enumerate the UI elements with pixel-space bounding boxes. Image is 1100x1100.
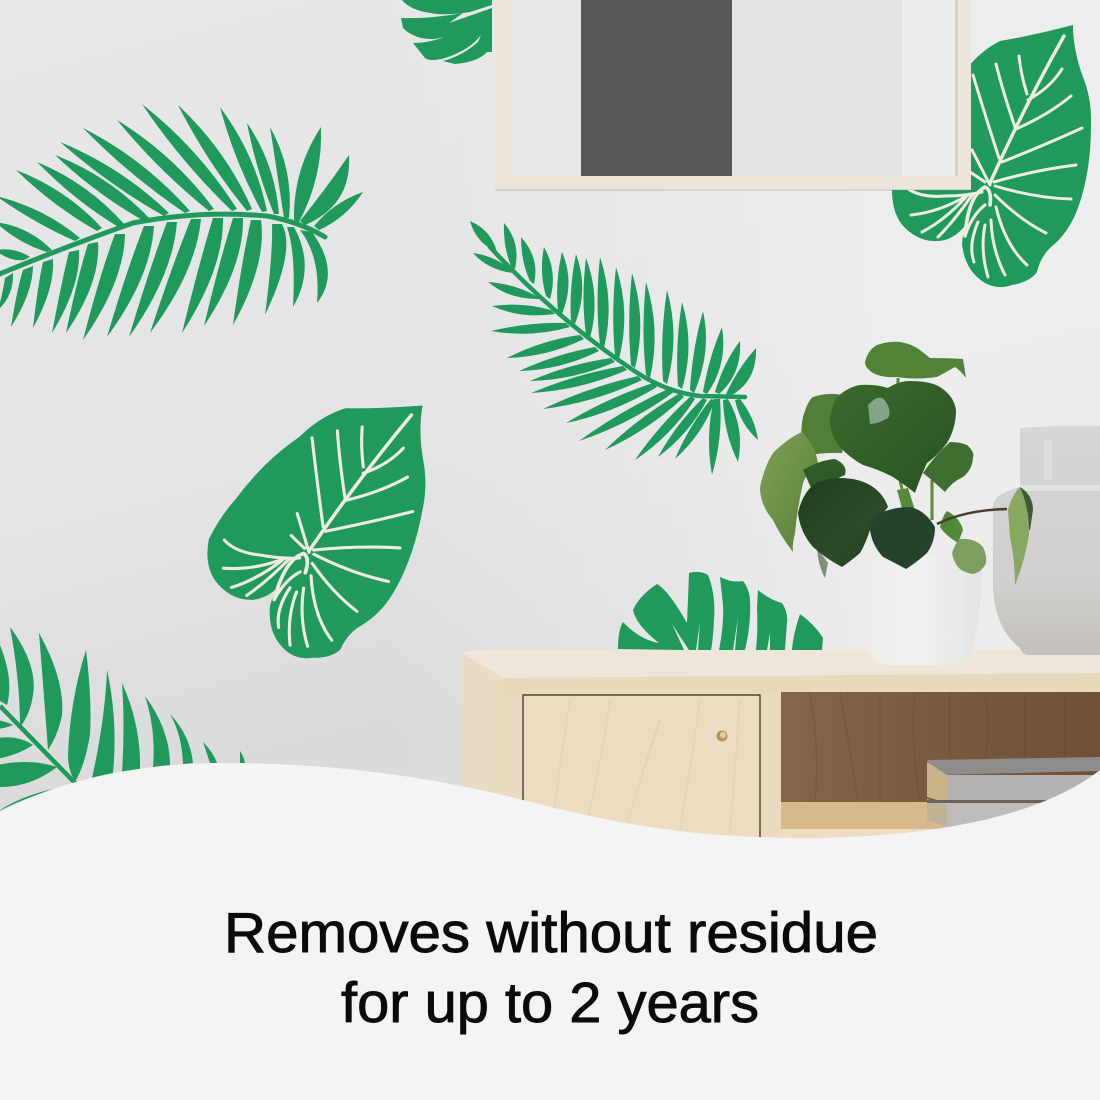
leaf highlight [868,398,890,424]
small mid leaf [940,511,963,543]
hanging leaf [817,548,828,578]
far right leaf [1020,487,1033,530]
drawer knob [716,730,728,742]
cabinet [462,650,1100,843]
palm leaf: centre [470,221,758,475]
monstera leaf: top, behind frame [401,0,492,64]
right leaf [923,442,973,492]
books [927,757,1100,826]
artwork [512,0,956,176]
stems [898,378,932,520]
palm leaf spine [490,247,745,397]
mid stems and centre [897,488,915,512]
palm leaf: upper left [0,104,363,340]
palm leaf spine [0,214,325,275]
white plant pot [858,556,982,665]
palm leaf spine [0,706,77,785]
palm leaf: lower left, cropped [0,627,245,812]
back leaf [801,394,850,457]
top leaf [865,342,966,378]
dark round leaf [798,478,888,567]
small light leaf [952,539,986,574]
arrowhead leaf: centre left [191,372,441,674]
wall art frame [495,0,971,191]
curved white panel [0,763,1100,1100]
small dark leaf [870,507,935,569]
large vase [993,426,1100,655]
mid leaf [803,459,846,490]
headline: Removes without residue [224,901,878,965]
large heart leaf [830,381,956,493]
brown stem [937,509,1007,524]
headline [224,901,878,1035]
arrowhead leaf: top right, tucked behind frame edge [892,25,1091,287]
left light leaf [760,432,818,552]
drawer [523,695,761,840]
open shelf [781,692,1100,804]
monstera leaf: bottom centre [618,572,823,650]
headline: for up to 2 years [341,971,759,1035]
cabinet top [462,650,1100,678]
potted plant [760,342,1033,585]
